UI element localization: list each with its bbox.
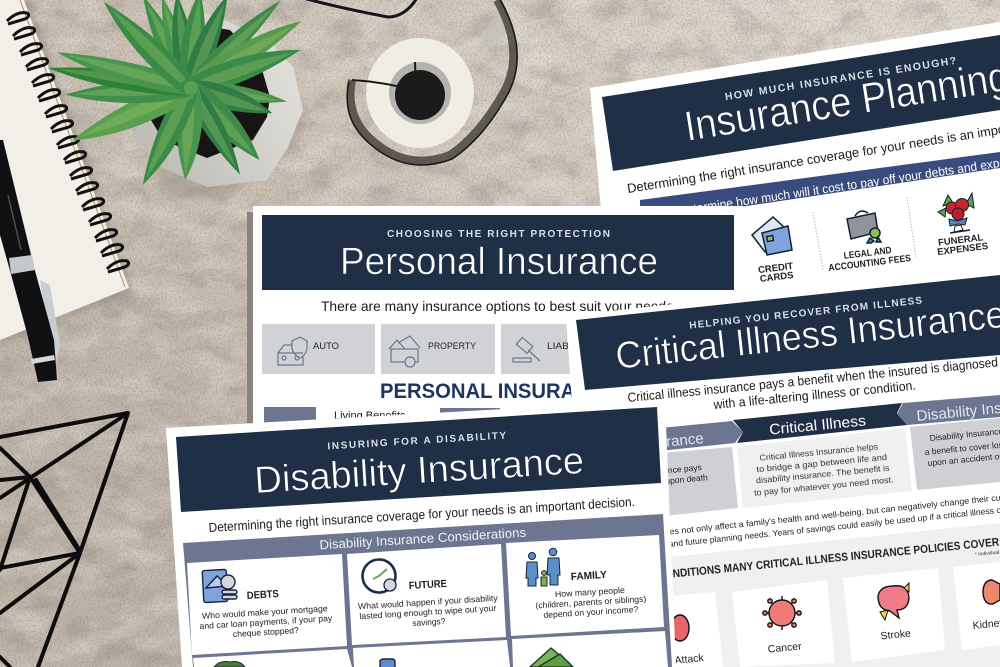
column: life insurance: Life insurance pays [628, 462, 702, 479]
column: critical illness: Critical Illness Insurance helps [759, 441, 878, 463]
row: living benefits [264, 407, 500, 429]
icon: credit cards [752, 217, 792, 255]
label: legal and accounting fees: ACCOUNTING FEES [828, 253, 912, 274]
tile: liability: LIABILITY [547, 341, 593, 351]
card: future [347, 544, 506, 645]
sheet: Critical Illness Insurance [566, 267, 1000, 667]
notebook with spiral binding [0, 0, 132, 345]
text: personal intro: There are many insurance options to best suit your needs [321, 298, 673, 314]
card: future: lasted long enough to wipe out your [359, 603, 497, 621]
label: funeral expenses: EXPENSES [937, 241, 989, 258]
label: funeral expenses: FUNERAL [937, 232, 984, 249]
label: credit cards: CARDS [759, 270, 794, 285]
heading: considerations: Disability Insurance Considerations [319, 525, 527, 552]
wire pyramid ornament [0, 413, 128, 667]
panel: covered conditions [646, 523, 1000, 667]
tile: liability [501, 324, 615, 374]
card: cancer: Cancer [767, 640, 803, 656]
text: critical illness intro: with a life-altering illness or condition. [712, 378, 916, 412]
tile: auto: AUTO [313, 341, 339, 351]
card: future: savings? [412, 616, 446, 628]
sheet: Insurance Planning [590, 22, 1000, 310]
card: debts: and car loan payments, if your pay [199, 613, 333, 631]
icon: funeral flowers [938, 193, 974, 233]
text: critical illness explanation: does not only affect a family's health and well-being, but can negatively change their current [659, 490, 1000, 537]
kicker: personal insurance: CHOOSING THE RIGHT PROTECTION [387, 229, 610, 240]
title: Disability Insurance: Disability Insurance [253, 440, 585, 502]
text: disability intro: Determining the right insurance coverage for your needs is an important decision. [208, 494, 635, 535]
card: family: FAMILY [570, 569, 607, 583]
card: future: FUTURE [408, 578, 447, 592]
card: future: What would happen if your disability [358, 593, 499, 611]
icon: clock [362, 560, 396, 592]
card: debts [187, 554, 347, 655]
card: stroke: Stroke [880, 628, 912, 642]
row: living benefits: Living Benefits [334, 410, 406, 422]
card: lower right [512, 631, 668, 667]
text: critical illness explanation: and future planning needs. Years of savings could easily be used up if a critical illness or [668, 504, 1000, 549]
card: kidney [953, 562, 1000, 650]
heading: personal insurance options: PERSONAL INSURANCE [380, 379, 618, 403]
card: debts: Who would make your mortgage [202, 603, 328, 621]
column: disability insurance [897, 395, 1000, 490]
card: family: (children, parents or siblings) [535, 594, 647, 610]
card: stroke [843, 568, 945, 662]
title: Personal Insurance: Personal Insurance [340, 241, 658, 283]
icon: family [526, 548, 560, 586]
kicker: critical illness: HELPING YOU RECOVER FROM ILLNESS [689, 295, 923, 332]
column: critical illness: to pay for whatever you need most. [754, 474, 894, 498]
kicker: disability: INSURING FOR A DISABILITY [327, 431, 507, 452]
card: debts: DEBTS [246, 588, 279, 602]
potted plant [46, 0, 312, 200]
card: family: depend on your income? [543, 604, 639, 620]
tile: auto [262, 324, 375, 374]
card: heart attack [646, 592, 723, 667]
card: lower left [193, 649, 352, 667]
card: cancer [732, 580, 835, 667]
icon: house and coins [202, 569, 237, 603]
label: credit cards [757, 261, 794, 285]
kicker: insurance planning: HOW MUCH INSURANCE IS ENOUGH? [724, 55, 957, 103]
label: legal and accounting fees: LEGAL AND [843, 245, 892, 262]
tile: property [381, 324, 495, 374]
column: critical illness [733, 403, 912, 508]
tape dispenser [303, 0, 517, 165]
column: critical illness: Critical Illness [768, 412, 867, 439]
sheet: Personal Insurance [247, 206, 743, 466]
card: lower middle [353, 640, 510, 667]
sheet: Disability Insurance [166, 400, 676, 667]
pen [0, 140, 60, 382]
panel: disability considerations [183, 514, 672, 667]
column: critical illness: disability insurance. The benefit is [756, 463, 890, 485]
icon: legal briefcase [847, 211, 881, 243]
column: life insurance [609, 421, 743, 517]
card: family: How many people [555, 585, 625, 599]
card: debts: cheque stopped? [233, 625, 299, 639]
column: critical illness: to bridge a gap between life and [756, 452, 888, 474]
footnote: individual policies: * Individual [975, 550, 1000, 558]
label: funeral expenses [937, 232, 989, 258]
column: life insurance: Life Insurance [609, 430, 704, 456]
card: family [506, 535, 664, 636]
column: life insurance: a benefit upon death [630, 472, 708, 489]
tile: property: PROPERTY [428, 341, 476, 351]
label: credit cards: CREDIT [757, 261, 794, 276]
